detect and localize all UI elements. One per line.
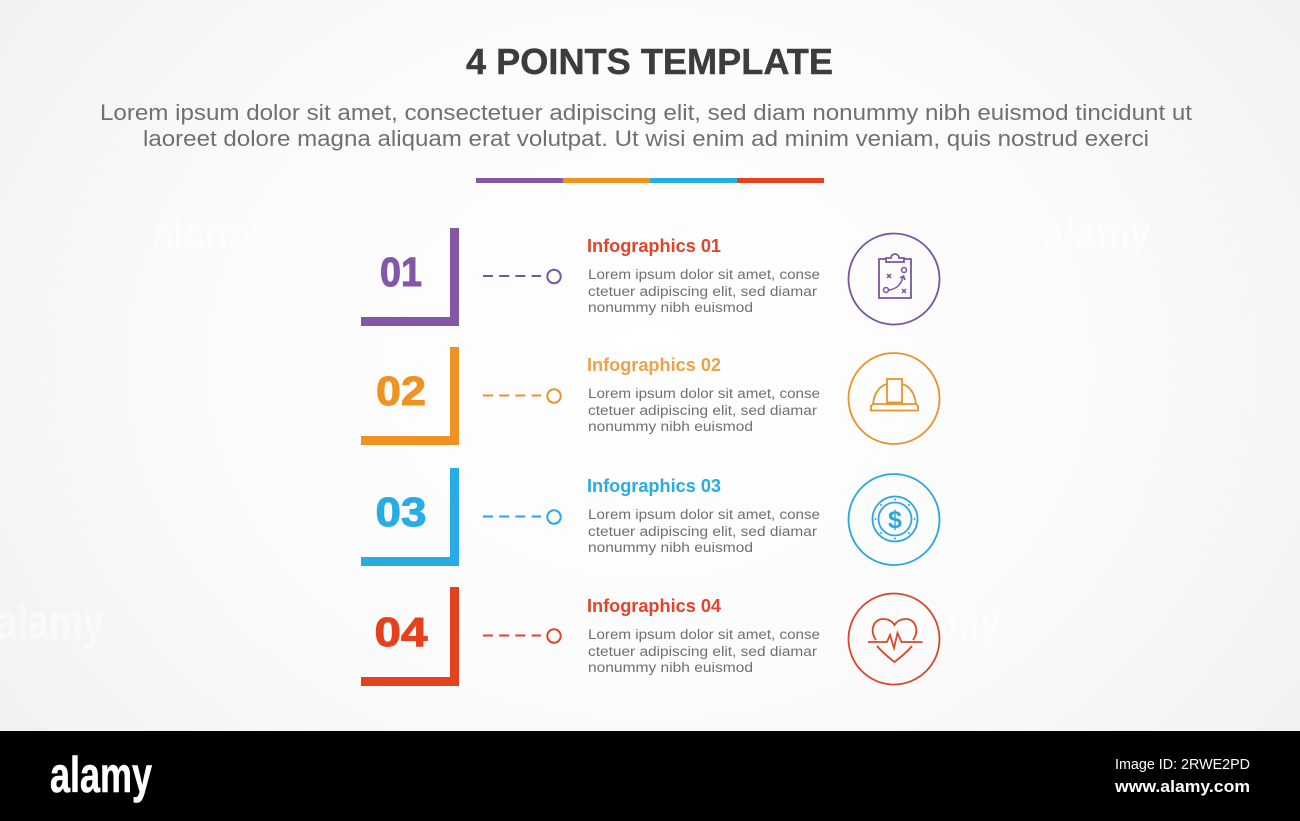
footer logo: alamy — [50, 747, 152, 803]
row 3 — [361, 468, 940, 566]
row 4 heading: Infographics 04 — [587, 595, 722, 616]
row 4 text block: Lorem ipsum dolor sit amet, conse — [588, 627, 820, 642]
faint watermarks — [0, 206, 1151, 650]
row 2 number: 02 — [376, 368, 426, 414]
faint watermarks: alamy — [1043, 206, 1151, 258]
row 1 text block: ctetuer adipiscing elit, sed diamar — [588, 284, 818, 299]
row 4 number bracket — [361, 587, 459, 686]
faint watermarks: alamy — [152, 206, 260, 258]
row 2 heading: Infographics 02 — [587, 354, 721, 375]
row 3 number bracket — [361, 468, 459, 566]
row 1 text block: nonummy nibh euismod — [588, 300, 753, 315]
row 3 heading: Infographics 03 — [587, 475, 721, 496]
row 1 dashed connector — [483, 270, 561, 283]
row 2 — [361, 347, 940, 445]
row 2 number bracket — [361, 347, 459, 445]
subtitle text block: laoreet dolore magna aliquam erat volutpat. Ut wisi enim ad minim veniam, quis nostrud exerci — [143, 126, 1149, 151]
row 4 text block: nonummy nibh euismod — [588, 660, 753, 675]
row 1 number bracket — [361, 228, 459, 326]
row 4 icon: heart with pulse — [848, 594, 940, 684]
footer bar — [0, 731, 1300, 821]
row 3 text block — [588, 507, 820, 555]
row 1 number: 01 — [380, 249, 422, 295]
row 3 icon: dollar coin: $ — [888, 506, 902, 534]
row 1 heading: Infographics 01 — [587, 235, 721, 256]
footer website: www.alamy.com — [1114, 777, 1250, 796]
row 1 icon: clipboard with strategy play — [848, 234, 940, 324]
row 1 — [361, 228, 940, 326]
row 3 number: 03 — [376, 489, 426, 535]
title: 4 POINTS TEMPLATE — [466, 41, 833, 82]
faint watermarks: alamy — [0, 594, 104, 650]
row 3 text block: Lorem ipsum dolor sit amet, conse — [588, 507, 820, 522]
row 1 text block — [588, 267, 820, 315]
row 2 text block: ctetuer adipiscing elit, sed diamar — [588, 403, 818, 418]
row 2 text block — [588, 386, 820, 434]
row 4 number: 04 — [374, 609, 428, 655]
subtitle text block — [100, 100, 1192, 151]
row 3 icon: dollar coin — [848, 474, 940, 565]
row 4 text block — [588, 627, 820, 675]
row 2 text block: Lorem ipsum dolor sit amet, conse — [588, 386, 820, 401]
row 2 dashed connector — [483, 389, 561, 403]
row 2 text block: nonummy nibh euismod — [588, 419, 753, 434]
colour divider bar — [476, 178, 824, 183]
row 4 — [361, 587, 940, 686]
row 2 icon: hard hat — [848, 353, 940, 444]
row 3 text block: nonummy nibh euismod — [588, 540, 753, 555]
row 1 text block: Lorem ipsum dolor sit amet, conse — [588, 267, 820, 282]
footer image id: Image ID: 2RWE2PD — [1115, 756, 1250, 773]
subtitle text block: Lorem ipsum dolor sit amet, consectetuer adipiscing elit, sed diam nonummy nibh euismod tincidunt ut — [100, 100, 1192, 125]
faint watermarks: alamy — [895, 594, 1000, 650]
row 3 dashed connector — [483, 510, 561, 524]
row 4 dashed connector — [483, 629, 561, 643]
row 3 text block: ctetuer adipiscing elit, sed diamar — [588, 524, 818, 539]
row 4 text block: ctetuer adipiscing elit, sed diamar — [588, 644, 818, 659]
